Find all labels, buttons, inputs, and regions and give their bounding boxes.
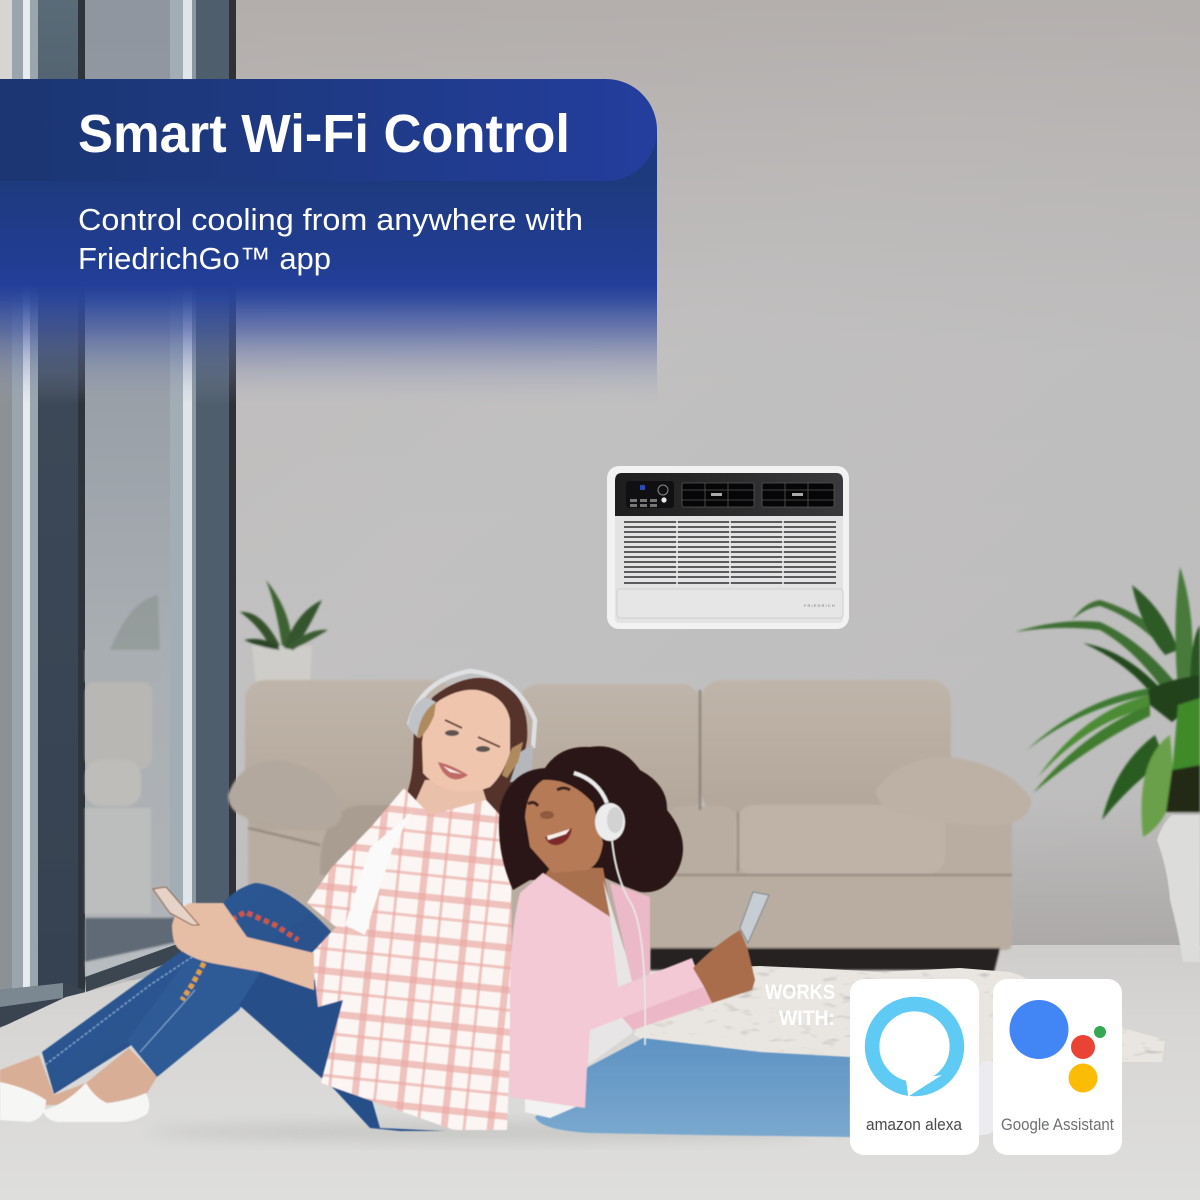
child's jeans: [535, 1038, 850, 1137]
child's sock between cards: [979, 1061, 1000, 1135]
embroidery on jeans: [182, 912, 298, 1000]
child's phone: [740, 892, 769, 943]
title: Smart Wi-Fi Control: [78, 104, 570, 164]
window frames on the left: [0, 0, 236, 1030]
panel header band: [0, 79, 657, 181]
AC control panel: [626, 481, 674, 508]
sofa: [228, 680, 1032, 972]
mother's ankles: [0, 1048, 157, 1105]
mother's socks: [0, 1082, 149, 1122]
mother's shirt: [307, 788, 512, 1130]
AC brand label: FRIEDRICH: [804, 603, 836, 608]
reflected sofa in glass: [85, 595, 180, 977]
panel gradient body: [0, 130, 657, 405]
works with label: WITH:: [779, 1007, 835, 1030]
AC vents: [682, 483, 834, 507]
works with label: WORKS: [765, 981, 835, 1004]
child's white shirt: [588, 880, 635, 1065]
small potted plant behind sofa: [240, 580, 328, 684]
child's facial features: [528, 788, 572, 845]
plant pot: [1157, 815, 1200, 962]
child's neck: [545, 868, 612, 918]
floor: [0, 945, 1200, 1200]
mother's hair: [400, 678, 527, 820]
card: google assistant: [993, 979, 1122, 1155]
AC top dark panel: [615, 473, 843, 516]
icon: alexa ring: [872, 1004, 957, 1096]
mother's neck: [346, 780, 490, 925]
AC louvres: [624, 522, 836, 583]
child's face: [525, 780, 603, 873]
air conditioner unit: [607, 466, 849, 629]
card: amazon alexa: [850, 979, 979, 1155]
child's headphones: [574, 773, 645, 1045]
person: child: [499, 746, 850, 1137]
blue heading panel: [0, 79, 657, 405]
google assistant label: Google Assistant: [1001, 1116, 1114, 1134]
mother's phone: [153, 887, 199, 925]
shadow under people: [150, 1122, 810, 1142]
child's cardigan: [510, 873, 713, 1108]
subtitle: FriedrichGo™ app: [78, 241, 331, 276]
icon: google assistant dots: [1010, 1000, 1106, 1092]
subtitle: [78, 202, 583, 276]
child's hair: [499, 746, 683, 892]
window sill: [0, 983, 85, 1027]
AC lower front: [617, 589, 843, 618]
alexa label: amazon alexa: [866, 1116, 963, 1134]
mother's facial features: [438, 720, 500, 779]
white undershirt: [345, 812, 412, 935]
child's hands: [693, 930, 755, 1003]
large plant on the right: [1015, 567, 1200, 962]
subtitle: Control cooling from anywhere with: [78, 202, 583, 237]
mother's jeans: [42, 883, 446, 1131]
mother's face: [422, 690, 510, 792]
rug: [634, 966, 1165, 1070]
mother's headphones: [408, 671, 535, 782]
mother's arm and hands: [172, 903, 314, 990]
person: mother: [0, 671, 535, 1131]
works with label: [765, 981, 835, 1030]
